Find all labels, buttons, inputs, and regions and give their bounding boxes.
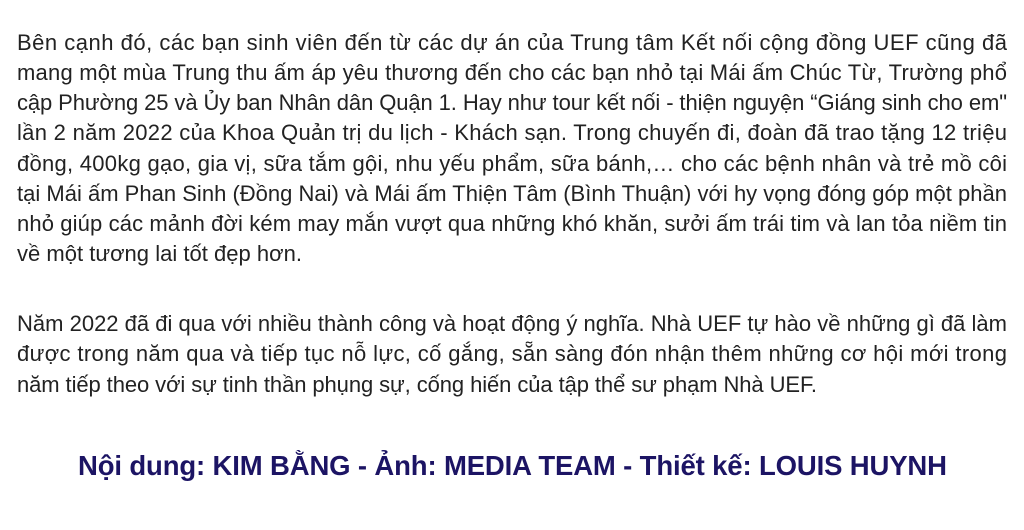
text block: second paragraph (17, 311, 1007, 397)
text block: first paragraph: Bên cạnh đó, các bạn sinh viên đến từ các dự án của Trung tâm Kết nối cộng đồng UEF cũng đã (17, 30, 1008, 55)
text block: first paragraph: về một tương lai tốt đẹp hơn. (17, 241, 302, 266)
text block: first paragraph: cập Phường 25 và Ủy ban Nhân dân Quận 1. Hay như tour kết nối - thiện nguyện “Giáng sinh cho em" (17, 90, 1007, 115)
text block: second paragraph: Năm 2022 đã đi qua với nhiều thành công và hoạt động ý nghĩa. Nhà UEF tự hào về những gì đã làm (17, 311, 1007, 336)
text block: first paragraph: đồng, 400kg gạo, gia vị, sữa tắm gội, nhu yếu phẩm, sữa bánh,… cho các bệnh nhân và trẻ mồ côi (17, 151, 1007, 176)
text block: first paragraph: lần 2 năm 2022 của Khoa Quản trị du lịch - Khách sạn. Trong chuyến đi, đoàn đã trao tặng 12 triệu (17, 120, 1007, 145)
text block: first paragraph: tại Mái ấm Phan Sinh (Đồng Nai) và Mái ấm Thiện Tâm (Bình Thuận) với hy vọng đóng góp một phần (17, 181, 1007, 206)
text block: second paragraph: năm tiếp theo với sự tinh thần phụng sự, cống hiến của tập thể sư phạm Nhà UEF. (17, 372, 817, 397)
text block: second paragraph: được trong năm qua và tiếp tục nỗ lực, cố gắng, sẵn sàng đón nhận thêm những cơ hội mới trong (17, 341, 1007, 366)
credits line: Nội dung: KIM BẰNG - Ảnh: MEDIA TEAM - Thiết kế: LOUIS HUYNH (78, 449, 947, 481)
text block: first paragraph (17, 30, 1008, 266)
text block: first paragraph: nhỏ giúp các mảnh đời kém may mắn vượt qua những khó khăn, sưởi ấm trái tim và lan tỏa niềm tin (17, 211, 1007, 236)
text block: first paragraph: mang một mùa Trung thu ấm áp yêu thương đến cho các bạn nhỏ tại Mái ấm Chúc Từ, Trường phổ (17, 60, 1007, 85)
